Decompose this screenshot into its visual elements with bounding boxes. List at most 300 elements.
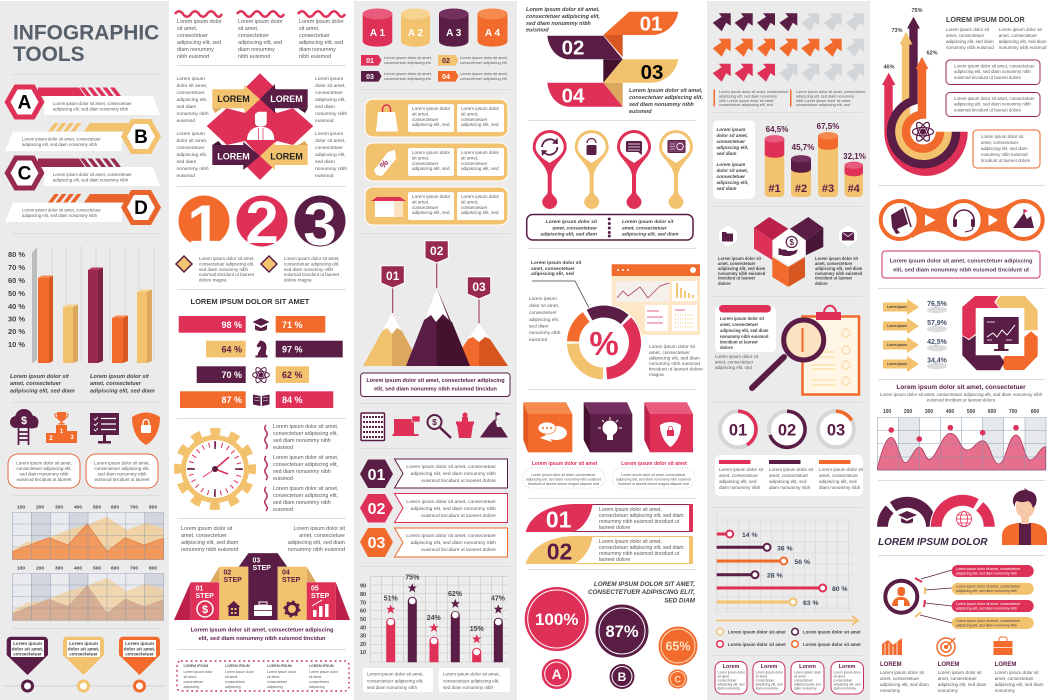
text notes around donut: nonummy nibh euismod — [649, 361, 700, 367]
bottom icon column 2 — [937, 638, 987, 693]
icon: graduation cap — [898, 511, 917, 524]
dashed box with four columns: consectetuer — [309, 680, 330, 684]
peak area chart — [877, 409, 1046, 470]
cylinder legend: 02 — [442, 58, 450, 65]
progress legend — [717, 628, 861, 647]
cylinder legend: consectetuer adipiscing elit — [384, 76, 432, 81]
area chart 1 — [12, 504, 164, 560]
icon: gear — [284, 602, 300, 616]
cylinder legend: 04 — [442, 74, 450, 81]
bar chart captions: amet, consectetuer — [90, 381, 142, 387]
hex list item 01 — [360, 459, 508, 488]
five step staircase: 01 — [196, 586, 203, 592]
ring legend box: adipiscing elit, sed — [719, 479, 757, 484]
four small cards: diam nonummy — [718, 686, 740, 690]
arrows with percentages: Lorem ipsum — [887, 362, 907, 366]
cube text: Lorem ipsum dolor sit — [718, 256, 762, 261]
clock side notes: Lorem ipsum dolor sit amet, — [273, 455, 338, 461]
horizontal progress chart: 63 % — [803, 600, 818, 607]
note box: sed diam — [716, 151, 736, 156]
star bar chart: 40 — [360, 626, 366, 632]
dashed box with four columns — [177, 661, 349, 691]
panel: price tag: sit amet, — [412, 156, 429, 160]
dashed box with four columns: LOREM IPSUM — [225, 664, 250, 668]
diverging percent bars: 64 % — [221, 344, 242, 354]
star bar chart: 51% — [384, 596, 398, 603]
clock side notes: euismod — [273, 476, 293, 482]
option banners A B C D — [4, 84, 161, 225]
two column text: amet, consectetuer — [946, 33, 985, 38]
cube text: dolore — [815, 281, 828, 286]
cylinder 2: #2 — [795, 183, 807, 195]
ribbon banner 02: nonummy nibh euismod tincidunt ut — [599, 551, 680, 557]
notes under arrows: adipiscing elit, sed diam nonummy — [719, 94, 777, 98]
icon: chess knight — [256, 340, 268, 358]
banner C — [4, 156, 160, 190]
star bar chart: 62% — [448, 591, 463, 598]
dashed box with four columns: consectetuer — [225, 680, 246, 684]
area chart 1: 800 — [149, 504, 157, 510]
text notes around donut: sed diam — [529, 324, 548, 330]
side text around arrow diagram: consectetuer — [315, 90, 343, 96]
side text around arrow diagram: adipiscing elit, — [315, 97, 346, 103]
four small cards: adipiscing elit, sed — [794, 682, 821, 686]
icon: briefcase — [994, 637, 1012, 655]
panel: bag: consectetuer — [412, 117, 439, 122]
numbers 1 2 3: 3 — [303, 191, 337, 258]
callout box 2: euismod tincidunt ut laoreet dolore — [954, 108, 1022, 112]
dashed box with four columns: LOREM IPSUM — [267, 664, 292, 668]
five step staircase: STEP — [252, 565, 271, 572]
3D bar chart: 60 % — [8, 276, 25, 285]
ring 03: 03 — [827, 422, 845, 440]
area chart 1: 200 — [36, 504, 44, 510]
panel: box: adipiscing elit, sed — [412, 210, 450, 215]
heading: italic right aligned: LOREM IPSUM DOLOR SIT AMET, — [594, 581, 695, 588]
pins caption box: adipiscing elit, sed diam — [622, 232, 679, 238]
org circle with connected pills: adipiscing elit, sed diam nonummy nibh — [956, 624, 1017, 628]
area chart 2: 300 — [55, 566, 63, 572]
badge 100%: 100% — [535, 610, 578, 629]
ribbon banner 02 — [526, 536, 693, 564]
two column text: adipiscing elit, sed diam — [999, 39, 1047, 44]
two column text: nonummy nibh euismod — [999, 45, 1047, 50]
diverging percent bars: 87 % — [221, 395, 242, 405]
mountain caption box: elit, sed diam nonummy nibh euismod tincidun — [374, 386, 498, 392]
wave headed text columns: adipiscing elit, sed — [238, 40, 282, 46]
magnifier note box: tincidunt ut laoreet — [720, 340, 758, 344]
title: TOOLS — [13, 43, 85, 66]
ribbon note bottom: euismod — [629, 109, 652, 115]
ribbon banner 01: consectetuer adipiscing elit, sed diam — [599, 513, 684, 519]
progress rings — [720, 411, 854, 447]
side text around arrow diagram: consectetuer — [176, 145, 205, 151]
icon: chat bubbles — [538, 422, 567, 442]
four small cards: sit amet, — [718, 674, 730, 678]
pin: sync — [533, 130, 567, 209]
cube captions: Lorem ipsum dolor sit amet, consectetuer — [531, 473, 596, 477]
icon: dollar coin: $ — [202, 604, 208, 616]
bottom icon column 3 — [994, 637, 1044, 693]
rounded text boxes: Lorem ipsum dolor sit amet, — [94, 460, 150, 466]
dashed box with four columns: consectetuer — [267, 680, 288, 684]
pins caption box: Lorem ipsum dolor sit — [546, 219, 597, 225]
star chart notes — [363, 668, 510, 692]
side text around arrow diagram: dolor sit amet, — [176, 138, 207, 144]
wave headed text columns: Lorem ipsum dolor — [177, 19, 222, 25]
pins caption box: amet, consectetuer — [622, 226, 668, 232]
diamond bullets with text: euismod tincidunt ut laoreet — [284, 272, 340, 277]
folded ribbon 01-04: 01 — [640, 12, 662, 36]
text notes around donut: adipiscing elit, — [529, 317, 559, 323]
side text around arrow diagram: dolor sit amet, — [315, 138, 346, 144]
arrows with percentages: Lorem ipsum — [887, 305, 907, 309]
ribbon note top: sed diam nonummy nibh — [526, 21, 591, 27]
hex list item 03: adipiscing elit, sed diam nonummy nibh — [411, 540, 496, 546]
pin 2: dolor sit amet, — [68, 646, 99, 651]
clock side notes: consectetuer adipiscing elit, — [273, 431, 338, 437]
bottom icon column 3: adipiscing elit, sed diam — [995, 682, 1044, 687]
pin 3: consectetuer — [125, 652, 154, 656]
rounded text boxes: Lorem ipsum dolor sit amet, — [16, 460, 72, 466]
four small cards: Lorem ipsum dolor — [756, 670, 784, 674]
icon: person orange — [892, 587, 910, 606]
banner B: B — [134, 127, 148, 148]
two column text: adipiscing elit, sed diam — [946, 39, 994, 44]
panel: price tag: adipiscing elit, sed — [461, 166, 499, 171]
mountains with flags — [363, 241, 508, 366]
panel: box: Lorem ipsum dolor — [412, 194, 451, 199]
side text around arrow diagram: Lorem ipsum — [176, 76, 205, 82]
wave headed text columns: consectetuer — [238, 33, 269, 39]
cube text: tincidunt ut laoreet — [815, 276, 852, 280]
magnifier note box: nonummy nibh euismod — [720, 334, 769, 339]
cube text: amet, consectetuer — [718, 261, 756, 266]
wave headed text columns: adipiscing elit, sed — [299, 40, 343, 46]
dashed box with four columns: sit amet, — [225, 675, 238, 679]
ring legend box: diam nonummy nibh — [819, 485, 861, 490]
star bar chart: 10 — [360, 650, 366, 656]
cycle arrows around monitor — [962, 296, 1038, 370]
dashed box with four columns: adipiscing — [267, 685, 283, 689]
icon: abacus — [361, 413, 384, 440]
panel: bag: Lorem ipsum dolor — [412, 106, 451, 111]
side text around arrow diagram: consectetuer — [315, 145, 343, 151]
ring legend box: amet, consectetuer — [819, 473, 859, 478]
cylinder legend: 01 — [366, 58, 374, 65]
icon: trophy podium: 3 — [70, 435, 74, 441]
banner C: Lorem ipsum dolor sit amet, consectetuer — [53, 172, 132, 177]
pins caption box: adipiscing elit, sed diam — [540, 232, 598, 238]
wave headed text columns: nibh euismod — [177, 54, 209, 60]
callout box 3 — [973, 130, 1040, 168]
dashed box with four columns: adipiscing — [184, 685, 199, 689]
ring legend box: Lorem ipsum dolor sit — [719, 467, 764, 472]
cube captions: tincidunt ut laoreet dolore magna aliquam erat — [618, 482, 689, 486]
cylinder 4: 32,1% — [843, 152, 866, 161]
area chart 1: 100 — [17, 504, 25, 510]
text notes around donut: magna — [649, 373, 664, 378]
pin 3: dolor sit amet, — [124, 646, 155, 651]
bar chart captions: adipiscing elit, sed diam — [10, 388, 75, 394]
cylinders A1-A4: A 3 — [446, 28, 462, 39]
banner D: D — [134, 198, 148, 219]
four small cards: diam nonummy — [834, 686, 856, 690]
panel: price tag: sit amet, — [461, 156, 478, 160]
area chart 2: 800 — [149, 566, 157, 572]
badge 65% — [658, 626, 698, 666]
3D cube orange — [523, 402, 572, 452]
banner D — [5, 190, 161, 225]
star bar chart: 70 — [360, 600, 366, 606]
cube captions: adipiscing elit, sed diam nonummy nibh euismod — [616, 478, 691, 482]
staircase caption: Lorem ipsum dolor sit amet, consectetuer adipiscing — [191, 628, 334, 634]
mountain caption box — [361, 373, 510, 396]
cylinder legend: Lorem ipsum dolor sit amet, — [460, 55, 508, 60]
four small cards: consectetuer — [756, 678, 775, 682]
clock side notes: consectetuer adipiscing elit, — [273, 493, 338, 499]
area chart 2 — [12, 566, 164, 620]
clock side notes: sed diam nonummy nibh — [273, 438, 331, 444]
panel: bag — [365, 99, 508, 137]
callout box 3: amet, consectetuer — [981, 140, 1019, 145]
org circle with connected pills: Lorem ipsum dolor sit amet, consectetuer — [956, 567, 1021, 571]
org circle with connected pills: Lorem ipsum dolor sit amet, consectetuer — [956, 585, 1021, 589]
five step staircase: 02 — [224, 570, 231, 576]
text notes around donut: Lorem ipsum dolor sit — [649, 344, 696, 350]
five step staircase: 05 — [311, 586, 319, 592]
magnifier note box: Lorem ipsum dolor sit — [720, 316, 765, 321]
four small cards: Lorem ipsum dolor — [718, 670, 746, 674]
side text around arrow diagram: euismod — [315, 173, 334, 179]
org circle with connected pills — [885, 565, 1034, 629]
star bar chart: 90 — [360, 584, 366, 590]
badge A: A — [552, 666, 562, 682]
panel: bag: sit amet, — [412, 112, 429, 116]
area chart 1: 400 — [74, 504, 82, 510]
side text around arrow diagram: euismod — [176, 173, 195, 179]
cube text: adipiscing elit, sed diam — [815, 266, 863, 271]
wave headed text columns: nibh euismod — [238, 54, 270, 60]
icon: globe — [956, 512, 972, 526]
panel: bag: Lorem ipsum dolor — [461, 106, 500, 111]
donut chart percent — [566, 304, 642, 380]
panel: price tag — [365, 143, 508, 181]
icon: light bulb — [598, 417, 622, 440]
pin: chat — [617, 130, 651, 209]
text notes around donut: consectetuer — [529, 310, 557, 316]
four small cards: adipiscing elit, sed — [834, 682, 861, 686]
callout box 2: Lorem ipsum dolor sit amet, consectetuer — [954, 96, 1035, 101]
bottom icon column 2: nonummy — [938, 688, 959, 693]
cylinder 2: 45,7% — [792, 143, 814, 152]
wave headed text columns: sit amet, — [238, 26, 259, 32]
clock side notes: sed diam nonummy nibh — [273, 500, 331, 506]
pin: lock — [575, 130, 609, 209]
panel: column 5 background — [707, 1, 870, 700]
flag 02 — [425, 241, 448, 288]
badge B — [610, 664, 634, 689]
cylinder legend: consectetuer adipiscing elit — [460, 60, 508, 65]
panel: box — [365, 187, 508, 225]
3D bar chart: 30 % — [8, 314, 25, 324]
rounded text boxes: consectetuer adipiscing elit, — [16, 466, 72, 471]
arrows with percentages: 76,5% — [927, 301, 948, 308]
note box: adipiscing elit, — [716, 145, 748, 150]
3D bar chart: 10 % — [8, 340, 25, 349]
icon: trophy podium — [46, 412, 77, 443]
progress legend: Lorem ipsum dolor sit amet — [728, 630, 786, 634]
star bar chart: 60 — [360, 608, 366, 614]
star bar chart: 50 — [360, 617, 366, 623]
rounded text boxes: sed diam nonummy nibh — [97, 472, 147, 476]
cylinder 1: #1 — [768, 183, 781, 195]
rising arrows with rings — [882, 8, 964, 172]
chain caption box: elit, sed diam nonummy nibh euismod tincidunt ut — [893, 268, 1029, 274]
diamond bullets with text: sed diam nonummy nibh — [199, 267, 249, 272]
bottom icon column 1: nonummy — [880, 688, 901, 693]
side text around arrow diagram: dolor sit amet, — [176, 83, 207, 89]
callout box 3: tincidunt ut laoreet dolore — [981, 158, 1031, 163]
four small cards: Lorem — [761, 664, 778, 670]
note box: dolor sit amet, — [716, 168, 748, 173]
hex icons: folder and mail — [719, 226, 857, 246]
banner A: A — [18, 92, 32, 114]
steps text: adipiscing elit, sed diam — [181, 540, 239, 546]
four small cards: sit amet, — [794, 674, 807, 678]
four small cards: adipiscing elit, sed — [756, 682, 783, 686]
area chart 1: 500 — [93, 504, 101, 510]
steps text: adipiscing elit, sed diam — [288, 540, 346, 546]
bar chart captions — [10, 374, 155, 394]
cube text: Lorem ipsum dolor sit — [815, 256, 859, 261]
flag 01: 01 — [386, 269, 400, 283]
hex list item 01: euismod tincidunt ut laoreet dolore — [421, 478, 496, 484]
note box: consectetuer — [716, 174, 745, 179]
cube captions — [522, 461, 695, 488]
ribbon banner 02: consectetuer adipiscing elit, sed diam — [599, 545, 684, 551]
panel: box: sit amet, — [412, 200, 429, 204]
dashed box with four columns: adipiscing — [225, 685, 241, 689]
banner D: Lorem ipsum dolor sit amet, consectetuer — [22, 208, 101, 212]
four small cards: consectetuer — [834, 678, 853, 682]
panel: box: consectetuer — [461, 205, 488, 210]
banner B: Lorem ipsum dolor sit amet, consectetuer — [22, 136, 101, 142]
dashed box with four columns: sit amet, — [267, 675, 280, 679]
3D bar chart: 20 % — [8, 327, 25, 336]
dashed box with four columns: Lorem ipsum dolor — [184, 670, 213, 674]
icon: businessman — [247, 112, 274, 140]
icon: coin and hand: $ — [789, 238, 794, 247]
rounded text boxes: euismod tincidunt ut laoreet — [94, 477, 150, 482]
arrow: yellow bottom right: LOREM — [270, 152, 303, 162]
magnifier note box — [715, 305, 776, 370]
ribbon note top: euismod — [526, 28, 549, 34]
dashed box with four columns: LOREM IPSUM — [309, 664, 334, 668]
cylinder 1 — [765, 125, 788, 197]
magnifier note box: adipiscing elit, sed — [715, 365, 752, 370]
five step staircase: STEP — [224, 577, 242, 584]
cylinder legend: Lorem ipsum dolor sit amet, — [384, 55, 432, 60]
cylinder 2 — [791, 143, 814, 197]
arrows with percentages — [883, 299, 948, 372]
pin 3: Lorem ipsum — [125, 641, 154, 646]
badge C: C — [674, 674, 681, 684]
icon: growth chart — [882, 638, 902, 655]
clock side notes: Lorem ipsum dolor sit amet, — [273, 486, 338, 492]
five step staircase: 03 — [252, 558, 260, 564]
panel: price tag: % — [378, 158, 390, 170]
four small cards: sit amet, — [756, 674, 768, 678]
arrow: maroon bottom left: LOREM — [217, 152, 250, 162]
progress legend: Lorem ipsum dolor sit amet — [803, 642, 861, 647]
hex list item 03: Lorem ipsum dolor sit amet, consectetuer — [406, 533, 496, 539]
rounded text boxes: consectetuer adipiscing elit, — [94, 466, 150, 471]
five step staircase: STEP — [311, 593, 330, 600]
horizontal progress chart — [716, 512, 853, 612]
five step staircase: STEP — [196, 593, 214, 600]
cylinder legend — [361, 55, 508, 82]
notes under arrows — [714, 90, 866, 107]
notes under arrows: consectetuer adipiscing elit, sed — [796, 103, 850, 107]
rising arrows with rings: 62% — [926, 50, 938, 56]
banner A — [4, 84, 160, 120]
pins caption box: amet, consectetuer — [552, 226, 598, 232]
badge 65%: 65% — [665, 640, 691, 654]
peak area chart: 400 — [946, 409, 954, 415]
icon: headset — [953, 210, 975, 232]
peak area chart: 600 — [988, 409, 996, 415]
text notes around donut: tincidunt ut laoreet dolore — [649, 366, 703, 372]
arrow: yellow top left: LOREM — [217, 94, 250, 104]
isometric cubes with hand and coin — [754, 217, 823, 287]
person avatar — [1002, 488, 1047, 545]
cylinders A1-A4: A 1 — [370, 28, 386, 39]
rising arrows with rings: 46% — [883, 64, 895, 70]
callout box 1 — [946, 60, 1040, 84]
heading: italic right aligned — [588, 581, 696, 604]
arrows with percentages: Lorem ipsum — [887, 324, 907, 328]
heading: lorem ipsum dolor sit amet: LOREM IPSUM DOLOR SIT AMET — [190, 297, 310, 306]
panel: column 3 background — [354, 1, 517, 700]
side text around arrow diagram: adipiscing elit, — [176, 152, 207, 158]
chart heading text — [880, 384, 1043, 402]
ribbon banner 01 — [526, 504, 693, 532]
peak area chart: 100 — [883, 409, 891, 415]
pin 1: Lorem ipsum — [13, 641, 42, 646]
diverging percent bars: 70 % — [221, 370, 242, 380]
icon: money cloud with ladder — [10, 409, 38, 445]
org circle with connected pills: Lorem ipsum dolor sit amet, consectetuer — [956, 619, 1021, 623]
two column text: Lorem ipsum dolor sit — [946, 27, 990, 32]
pins row — [533, 130, 693, 209]
side text around arrow diagram: adipiscing elit, — [176, 97, 207, 103]
cylinder percent chart — [765, 122, 866, 197]
browser window — [612, 264, 700, 335]
callout box 1: adipiscing elit, sed diam nonummy nibh — [954, 69, 1031, 74]
icon: money cloud with ladder: $ — [21, 415, 27, 427]
horizontal progress chart: 56 % — [794, 559, 810, 566]
hex list item 02: 02 — [368, 501, 386, 518]
area chart 2: 500 — [93, 566, 101, 572]
banner A: Lorem ipsum dolor sit amet, consectetuer — [53, 101, 132, 106]
wave headed text columns — [175, 11, 345, 60]
star bar chart: 30 — [360, 634, 366, 640]
mountain caption box: Lorem ipsum dolor sit amet, consectetuer adipiscing — [366, 378, 505, 384]
wave headed text columns: consectetuer — [299, 33, 330, 39]
heading: lorem ipsum dolor: LOREM IPSUM DOLOR — [946, 15, 1025, 24]
bottom icon column 2: adipiscing elit, sed diam — [938, 682, 987, 687]
